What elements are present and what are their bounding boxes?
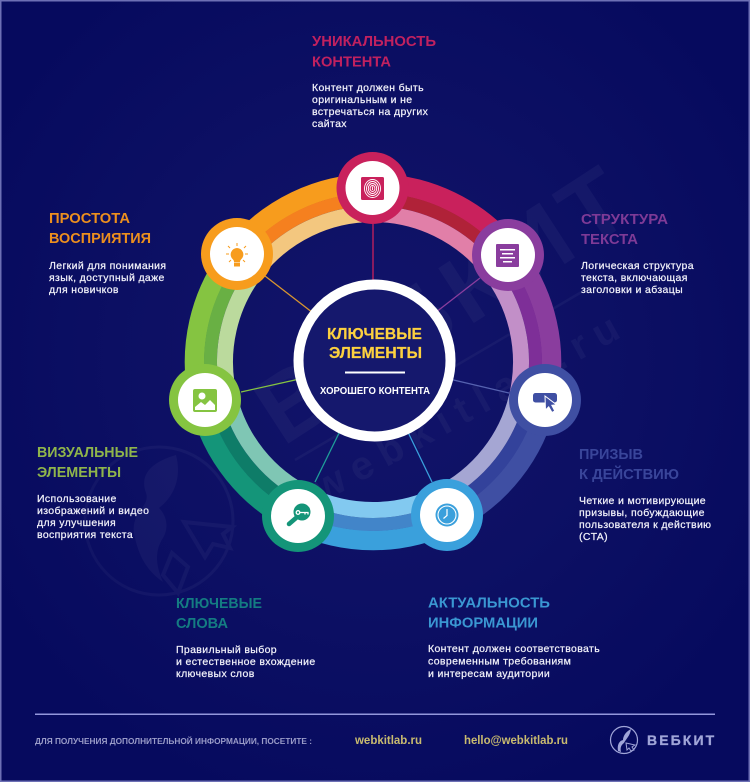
body: (CTA) — [579, 531, 608, 543]
text: visual elements — [37, 445, 149, 541]
icon: picture — [193, 389, 217, 412]
body — [428, 643, 600, 680]
segment: purple — [122, 111, 624, 613]
watermark: ВЕБКИТ — [237, 143, 652, 465]
body: современным требованиям — [428, 656, 571, 668]
body: Четкие и мотивирующие — [579, 495, 706, 507]
heading: К ДЕЙСТВИЮ — [579, 465, 679, 483]
heading — [176, 596, 262, 632]
body: оригинальным и не — [312, 94, 412, 106]
body: язык, доступный даже — [49, 272, 165, 284]
heading: ИНФОРМАЦИИ — [428, 616, 538, 632]
heading — [312, 34, 436, 70]
heading — [581, 212, 669, 248]
body: сайтах — [312, 118, 347, 130]
body: Правильный выбор — [176, 644, 277, 656]
body: призывы, побуждающие — [579, 507, 705, 519]
footer — [35, 714, 716, 754]
text: simplicity — [49, 211, 166, 296]
segment: teal — [135, 124, 611, 600]
centre title: КЛЮЧЕВЫЕ — [327, 326, 422, 343]
text: structure — [581, 212, 694, 296]
body: заголовки и абзацы — [581, 284, 683, 296]
body: Легкий для понимания — [49, 260, 166, 272]
footer site link: webkitlab.ru — [354, 735, 422, 747]
heading — [37, 445, 138, 481]
icon: text lines — [496, 244, 519, 267]
centre title — [327, 326, 422, 362]
footer note: ДЛЯ ПОЛУЧЕНИЯ ДОПОЛНИТЕЛЬНОЙ ИНФОРМАЦИИ, ПОСЕТИТЕ : — [35, 735, 312, 746]
centre title: ЭЛЕМЕНТЫ — [329, 345, 422, 362]
spokes — [241, 224, 509, 482]
node: clock — [411, 479, 483, 551]
footer logo: ВЕБКИТ — [647, 732, 716, 748]
heading — [428, 596, 550, 632]
body — [581, 260, 694, 296]
body: встречаться на других — [312, 106, 429, 118]
centre circle — [298, 284, 450, 436]
body: для новичков — [49, 284, 119, 296]
body: Использование — [37, 493, 117, 505]
heading: ВИЗУАЛЬНЫЕ — [37, 445, 138, 461]
body: изображений и видео — [37, 505, 149, 517]
heading: СТРУКТУРА — [581, 212, 669, 228]
text: keywords — [176, 596, 316, 680]
footer logo — [610, 726, 716, 754]
body — [37, 493, 149, 541]
icon: button and cursor — [533, 393, 557, 412]
heading: АКТУАЛЬНОСТЬ — [428, 596, 550, 612]
heading: КОНТЕНТА — [312, 54, 392, 70]
text: up to date — [428, 596, 600, 680]
segment: indigo — [160, 149, 586, 575]
node: fingerprint — [336, 152, 408, 224]
body: для улучшения — [37, 517, 116, 529]
heading: ТЕКСТА — [581, 232, 639, 248]
heading: ПРОСТОТА — [49, 211, 131, 227]
node: document — [472, 219, 544, 291]
node: key search — [262, 480, 334, 552]
body: Контент должен быть — [312, 82, 424, 94]
heading — [579, 447, 679, 483]
text: call to action — [579, 447, 711, 543]
heading: ВОСПРИЯТИЯ — [49, 231, 151, 247]
body: и естественное вхождение — [176, 656, 316, 668]
ring: seven coloured segments — [122, 111, 624, 613]
heading: КЛЮЧЕВЫЕ — [176, 596, 262, 612]
node: call to action — [509, 364, 581, 436]
heading — [49, 211, 151, 247]
centre subtitle: ХОРОШЕГО КОНТЕНТА — [320, 386, 430, 397]
icon: magnifier and key — [289, 504, 310, 524]
heading: УНИКАЛЬНОСТЬ — [312, 34, 436, 50]
icon: fingerprint — [361, 177, 384, 200]
body — [312, 82, 429, 130]
body: Контент должен соответствовать — [428, 643, 600, 655]
heading: ПРИЗЫВ — [579, 447, 643, 463]
icon: clock — [436, 504, 458, 526]
segment: crimson — [194, 184, 552, 540]
centre divider — [345, 372, 405, 374]
body: восприятия текста — [37, 529, 133, 541]
body — [176, 644, 316, 680]
body: и интересам аудитории — [428, 668, 550, 680]
segment: green — [159, 148, 587, 576]
node: bulb — [201, 218, 273, 290]
node: image — [169, 364, 241, 436]
body — [579, 495, 711, 543]
body: Логическая структура — [581, 260, 694, 272]
body: текста, включающая — [581, 272, 688, 284]
body: пользователя к действию — [579, 519, 711, 531]
heading: ЭЛЕМЕНТЫ — [37, 465, 121, 481]
footer email: hello@webkitlab.ru — [464, 735, 568, 747]
body — [49, 260, 166, 296]
heading: СЛОВА — [176, 616, 229, 632]
segment: sky blue — [134, 123, 612, 601]
watermark: webkitlab.ru — [304, 301, 635, 511]
watermark — [85, 143, 652, 595]
text: uniqueness — [312, 34, 436, 130]
segment: orange — [122, 111, 624, 613]
icon: light bulb — [226, 243, 248, 266]
body: ключевых слов — [176, 668, 255, 680]
